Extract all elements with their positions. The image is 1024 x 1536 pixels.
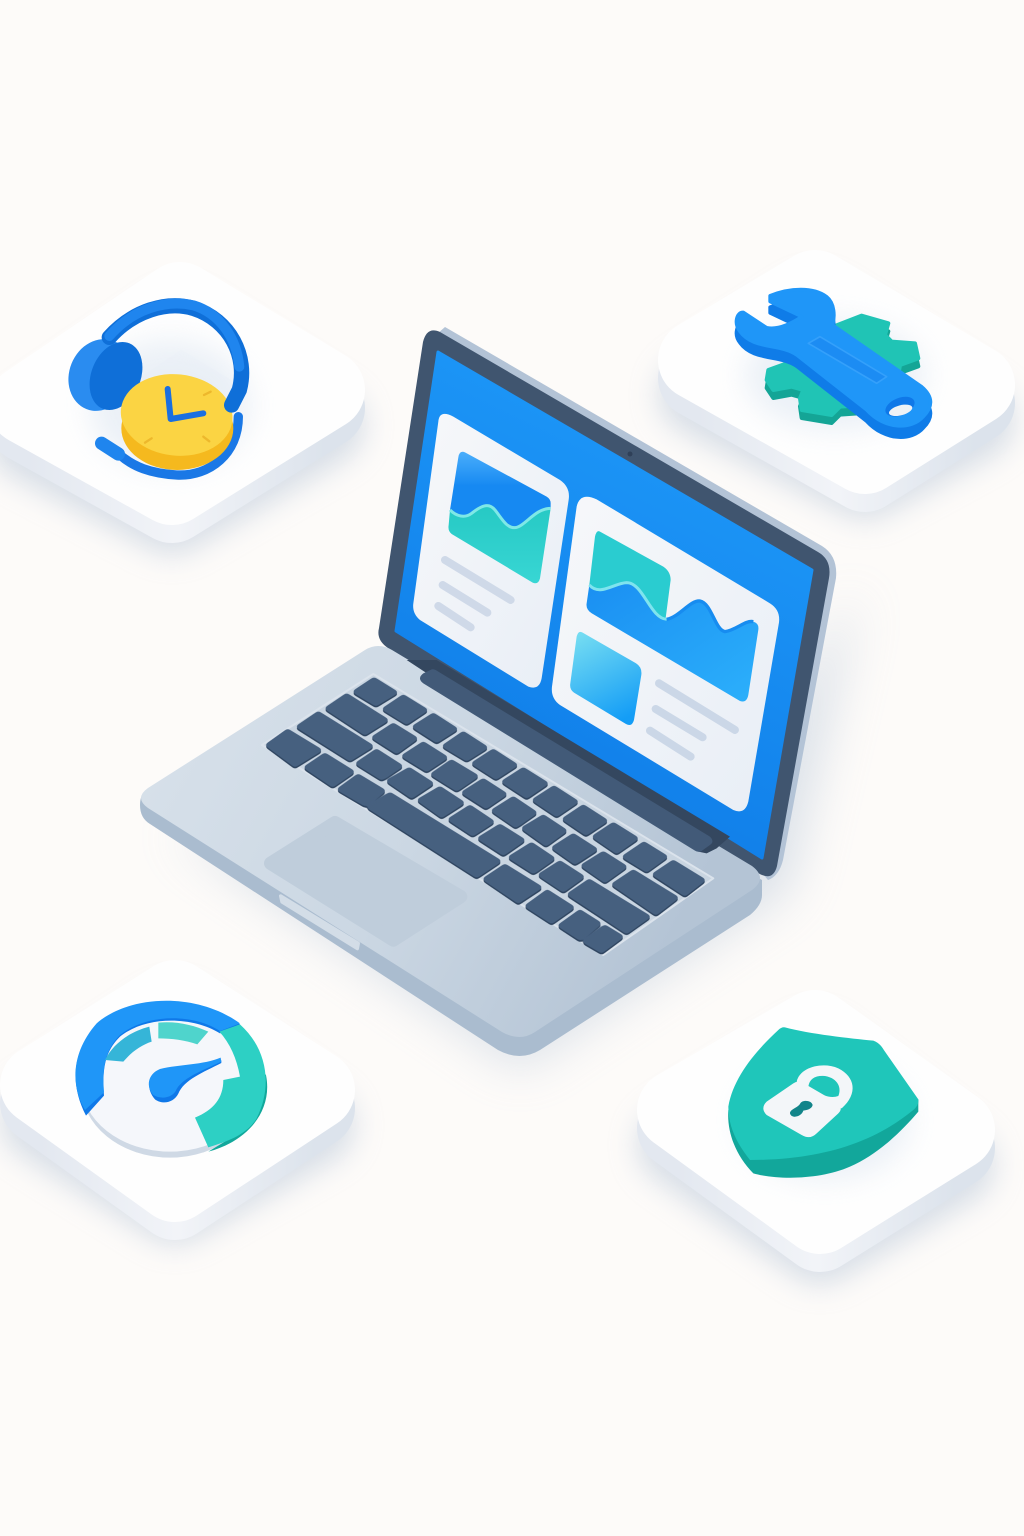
laptop [140,327,860,1070]
dashboard panels [413,414,779,811]
laptop shadow [170,590,860,1070]
image tile [570,632,641,725]
laptop lid [378,327,836,880]
icon: headset with clock [58,304,242,475]
panel: right card [552,497,779,811]
laptop screen [396,352,812,858]
keyboard tray [262,674,713,955]
panel: left card [413,414,569,688]
tile: support headset and clock [28,302,325,515]
hinge [262,660,730,955]
trackpad notch [281,896,358,949]
icon: gauge [75,1001,267,1158]
icon: wrench and gear [736,289,931,437]
area chart [587,531,758,701]
keyboard keys [267,678,704,954]
tile: security shield [677,1027,955,1245]
area chart [448,452,551,583]
tile: maintenance wrench and gear [698,289,975,480]
tile: speed gauge [40,1000,315,1205]
laptop base [140,646,762,1056]
trackpad [271,823,461,940]
webcam [628,452,632,456]
icon: shield with padlock [728,1027,918,1178]
